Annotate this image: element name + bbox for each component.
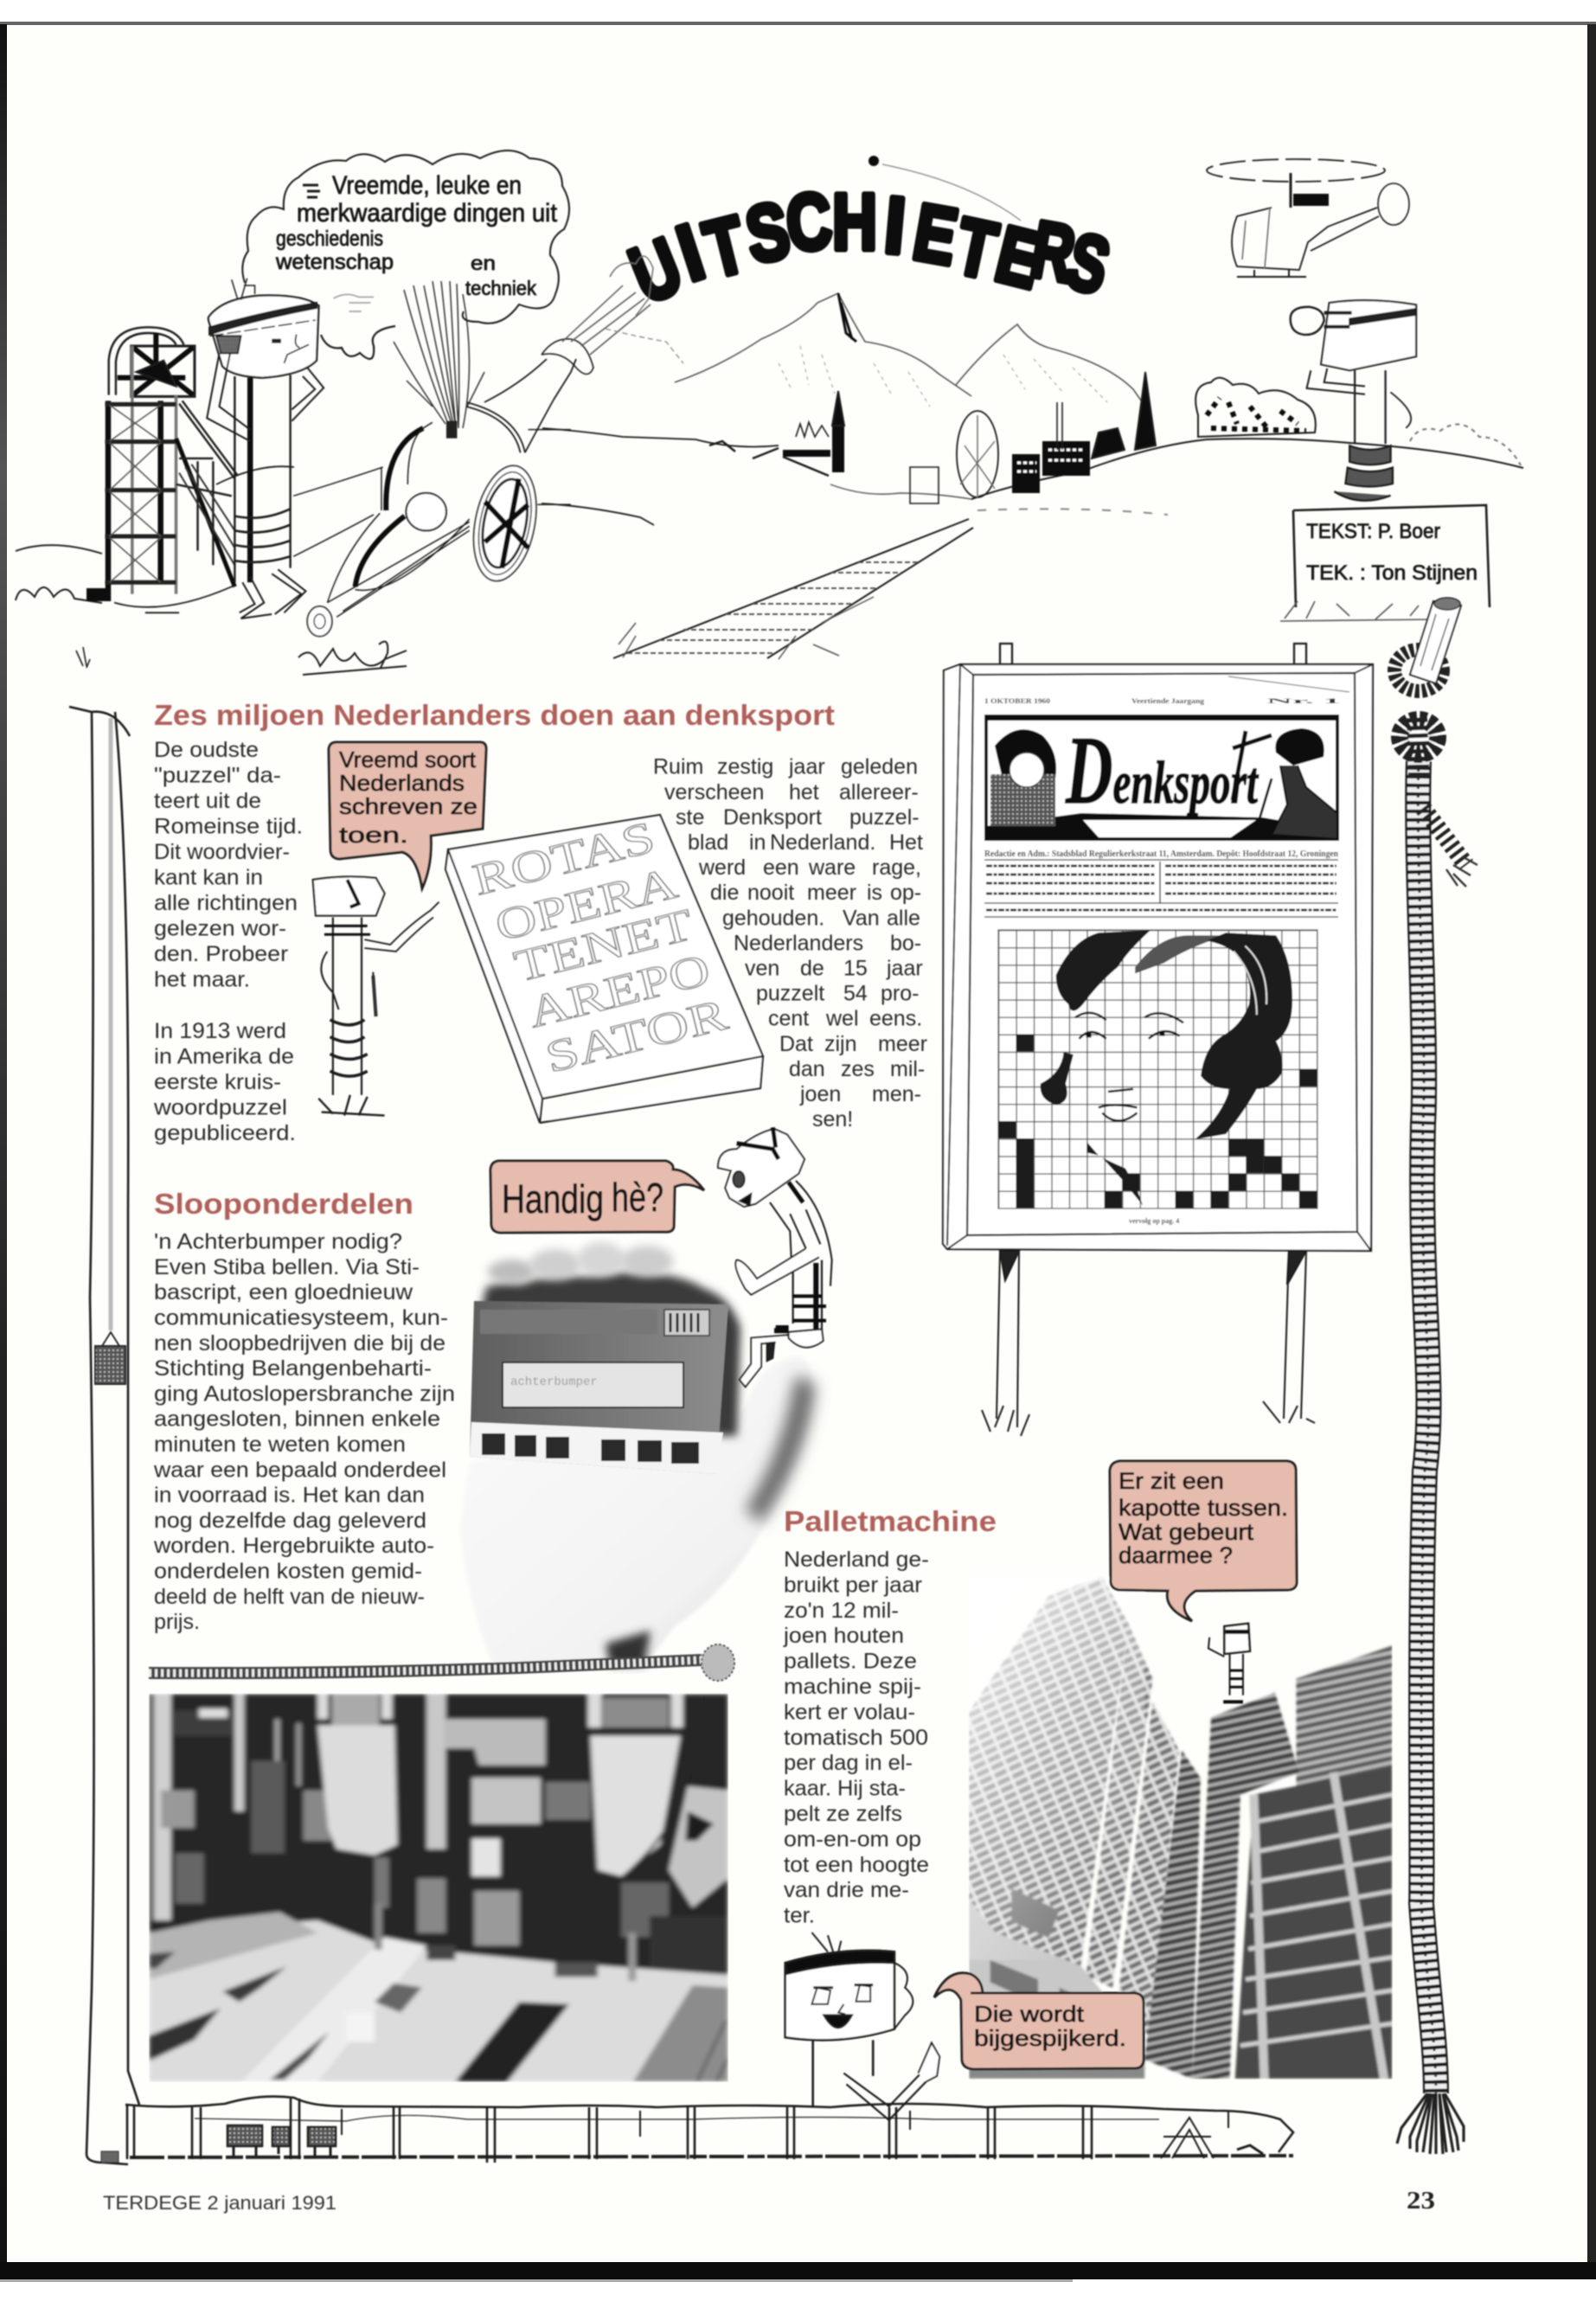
speech bubble: Er zit een kapotte tussen: [1110, 1461, 1297, 1621]
speech bubble: Die wordt bijgespijkerd: Die wordt: [974, 2001, 1085, 2027]
speech bubble: Er zit een kapotte tussen: Wat gebeurt: [1118, 1519, 1254, 1545]
text block: per dag in el-: [784, 1751, 913, 1775]
text block: right column wrapped around the book: meer: [807, 881, 856, 905]
mine tower: [87, 327, 238, 612]
thought cloud with intro text: [242, 151, 569, 359]
thought cloud with intro text: Vreemde, leuke en: [332, 171, 522, 200]
cannon: [293, 402, 571, 637]
title: U: [619, 221, 694, 320]
text block: right column wrapped around the book: die: [710, 881, 739, 905]
heading: Palletmachine: [784, 1505, 997, 1537]
speech bubble: Die wordt bijgespijkerd: [934, 1973, 1144, 2069]
crossword grid with portrait: [998, 930, 1317, 1225]
heading: Zes miljoen Nederlanders doen aan denksport: [154, 699, 835, 731]
speech bubble: Vreemd soort: toen.: [339, 822, 408, 848]
magazine publisher lines: [984, 849, 1338, 917]
text block: joen houten: [783, 1624, 904, 1648]
text block: right column wrapped around the book: joen: [799, 1082, 841, 1106]
page number: 23: [1407, 2188, 1435, 2214]
title: T: [696, 200, 754, 295]
text block: right column wrapped around the book: alle: [887, 906, 920, 930]
credits sign: [1280, 505, 1490, 621]
text block: right column wrapped around the book: mil-: [890, 1057, 925, 1081]
fingers: [481, 1242, 740, 1436]
text block: pallets. Deze: [784, 1650, 917, 1674]
landscape hills, mountains and railway: [16, 293, 1523, 675]
Denksport masthead: [985, 715, 1338, 839]
portrait: face features: [1075, 1013, 1183, 1121]
Denksport masthead: VOOR VIJF WIJSGENEN: [1099, 825, 1227, 838]
text block: 'n Achterbumper nodig?: [154, 1230, 402, 1254]
text block: right column wrapped around the book: is: [867, 881, 882, 905]
text block: left column: De oudste: [154, 738, 259, 762]
text block: machine spij-: [784, 1675, 921, 1699]
crossword grid with portrait: vervolg op pag. 4: [1129, 1217, 1179, 1225]
small character on top of the pallets: [1208, 1624, 1250, 1702]
text block: [153, 1230, 455, 1634]
text block: van drie me-: [784, 1878, 909, 1902]
panel: Denksport magazine on signboard: [943, 644, 1373, 1436]
character with binoculars: [1291, 300, 1416, 501]
icon: hanging weight: [95, 1346, 125, 1384]
thought cloud with intro text: en: [471, 252, 496, 274]
panel: denksport article: [153, 699, 927, 1145]
thought cloud with intro text: merkwaardige dingen uit: [297, 199, 558, 228]
credits sign: TEKST: P. Boer: [1306, 520, 1440, 543]
panel: Slooponderdelen article: [149, 1127, 832, 1681]
text block: left column: "puzzel" da-: [154, 763, 281, 787]
text block: minuten te weten komen: [154, 1433, 406, 1457]
bushes and trees on the right hill: [1195, 378, 1521, 465]
text block: left column: woordpuzzel: [153, 1095, 287, 1119]
character pointing at the book: [313, 876, 439, 1116]
speech bubble: Vreemd soort: [329, 742, 486, 888]
text block: right column wrapped around the book: Nederlanders: [734, 931, 863, 955]
text block: zo'n 12 mil-: [784, 1599, 899, 1623]
title: E: [988, 209, 1049, 305]
device: [470, 1301, 728, 1474]
character sitting on the device: [718, 1127, 832, 1387]
book with ROTAS word square: [445, 813, 763, 1123]
text block: right column wrapped around the book: bo-: [890, 931, 921, 955]
text block: right column wrapped around the book: jaar: [886, 957, 923, 981]
text block: bruikt per jaar: [784, 1573, 922, 1597]
magazine date line: Veertiende Jaargang: [1131, 696, 1205, 705]
text block: right column wrapped around the book: dan: [789, 1057, 825, 1081]
text block: kaar. Hij sta-: [784, 1777, 906, 1801]
text block: right column wrapped around the book: Ruim: [653, 755, 703, 779]
text block: tot een hoogte: [784, 1853, 929, 1877]
text block: right column wrapped around the book: Denksport: [723, 805, 822, 830]
text block: left column: In 1913 werd: [154, 1019, 286, 1043]
hand palm and thumb: [460, 1356, 814, 1665]
Denksport masthead: Denksport: [1065, 717, 1259, 824]
text block: right column wrapped around the book: puzzelt: [756, 982, 824, 1006]
text block: right column wrapped around the book: op-: [890, 881, 921, 905]
magazine date line: Nr. 1: [1266, 696, 1341, 705]
text block: right column wrapped around the book: geleden: [841, 755, 918, 779]
text block: ging Autoslopersbranche zijn: [154, 1381, 455, 1406]
speech bubble: Handig hè: Handig: [502, 1176, 604, 1221]
mine shaft rope frame on the left: [69, 707, 139, 2164]
text block: left column: teert uit de: [154, 789, 261, 813]
text block: right column wrapped around the book: jaar: [788, 755, 825, 779]
text block: right column wrapped around the book: 15: [843, 957, 868, 981]
text block: Nederland ge-: [784, 1548, 929, 1572]
book with ROTAS word square: TENET: [510, 901, 698, 992]
text block: left column: den. Probeer: [154, 942, 288, 966]
panel: header landscape illustration: [16, 151, 1523, 675]
text block: right column wrapped around the book: de: [800, 957, 824, 981]
water fountain from cannon: [394, 281, 484, 428]
title: C: [783, 176, 836, 268]
text block: nen sloopbedrijven die bij de: [154, 1331, 445, 1356]
device: achterbumper: [510, 1375, 598, 1389]
text block: right column wrapped around the book: ste: [676, 805, 704, 830]
title: I: [881, 180, 909, 271]
text block: om-en-om op: [784, 1827, 921, 1851]
text block: right column wrapped around the book: het: [789, 780, 819, 804]
thought cloud with intro text: techniek: [465, 277, 536, 299]
magazine name and date: TERDEGE 2 januari 1991: [103, 2192, 337, 2214]
text block: deeld de helft van de nieuw-: [154, 1585, 425, 1609]
title: S: [1059, 215, 1118, 311]
thought cloud with intro text: geschiedenis: [276, 227, 383, 251]
character looking through hand: [207, 279, 374, 619]
photo: pallet nailing machine: [149, 1694, 728, 2082]
text block: left column: eerste kruis-: [154, 1070, 281, 1094]
book with ROTAS word square: ROTAS: [468, 813, 660, 906]
text block: right column wrapped around the book: cent: [768, 1007, 809, 1031]
footer: [103, 2188, 1435, 2214]
magazine date line: 1 OKTOBER 1960: [984, 696, 1050, 705]
text block: right column wrapped around the book: Nederland.: [770, 830, 875, 855]
text block: pelt ze zelfs: [784, 1802, 902, 1826]
speech bubble: Handig hè: [490, 1161, 704, 1233]
photo: hand holding the communication device: [460, 1242, 815, 1665]
portrait: hair: [1041, 930, 1292, 1206]
title: R: [1025, 203, 1081, 298]
text block: nog dezelfde dag geleverd: [154, 1509, 426, 1533]
magazine publisher lines: Redactie en Adm.: Stadsblad Regulierkerkstraat 11, Amsterdam. Depôt: Hoofdstraat 12, Groningen: [984, 849, 1338, 859]
text block: right column wrapped around the book: nooit: [747, 881, 794, 905]
speech bubble: Er zit een kapotte tussen: kapotte tussen.: [1118, 1495, 1288, 1521]
book with ROTAS word square: OPERA: [490, 858, 683, 952]
speech bubble: Handig hè: hè?: [612, 1175, 663, 1220]
text block: ter.: [784, 1904, 815, 1928]
text block: right column wrapped around the book: puzzel-: [849, 805, 920, 830]
text block: aangesloten, binnen enkele: [154, 1407, 440, 1432]
text block: right column wrapped around the book: blad: [688, 830, 728, 855]
text block: left column: Romeinse tijd.: [154, 815, 303, 839]
text block: kert er volau-: [784, 1700, 915, 1724]
title: S: [740, 186, 796, 280]
text block: in voorraad is. Het kan dan: [154, 1484, 425, 1508]
text block: right column wrapped around the book: meer: [878, 1032, 927, 1056]
text block: tomatisch 500: [784, 1726, 928, 1750]
text block: right column wrapped around the book: allereer-: [839, 780, 919, 804]
small town on the horizon: [709, 372, 1156, 503]
text block: right column wrapped around the book: verscheen: [664, 780, 764, 804]
title: [619, 156, 1118, 320]
text block: right column wrapped around the book: in: [749, 830, 766, 855]
magazine date line: [984, 696, 1341, 705]
text block: right column wrapped around the book: ven: [745, 957, 779, 981]
speech bubble: Vreemd soort: schreven ze: [339, 793, 478, 819]
cannon barrel and muzzle smoke: [484, 256, 683, 452]
text block: right column wrapped around the book: zes: [841, 1057, 875, 1081]
text block: left column: Dit woordvier-: [154, 840, 290, 864]
text block: right column wrapped around the book: werd: [698, 856, 746, 880]
title: H: [832, 177, 877, 266]
text block: right column wrapped around the book: eens.: [869, 1007, 922, 1031]
text block: left column: gepubliceerd.: [154, 1121, 296, 1145]
frayed rope end: [1397, 2093, 1464, 2154]
text block: right column wrapped around the book: een: [763, 856, 799, 880]
speech bubble: Er zit een kapotte tussen: daarmee ?: [1118, 1542, 1233, 1568]
text block: right column wrapped around the book: men-: [872, 1082, 921, 1106]
text block: right column wrapped around the book: rage,: [872, 856, 921, 880]
text block: Stichting Belangenbeharti-: [154, 1356, 432, 1381]
signboard frame and legs: [943, 644, 1373, 1436]
photo: towers of stacked pallets: [969, 1577, 1392, 2079]
heading: Slooponderdelen: [154, 1188, 413, 1220]
text block: right column wrapped around the book: gehouden.: [722, 906, 824, 930]
helicopter: [1207, 159, 1409, 277]
text block: right column wrapped around the book: Dat: [779, 1032, 813, 1056]
text block: right column wrapped around the book: Het: [889, 830, 923, 855]
rope on the right side: [1394, 598, 1477, 2154]
text block: onderdelen kosten gemid-: [154, 1559, 422, 1583]
text block: Even Stiba bellen. Via Sti-: [154, 1255, 420, 1279]
mine carts: [228, 2125, 336, 2156]
text block: right column wrapped around the book: zestig: [717, 755, 773, 779]
text block: right column wrapped around the book: [653, 755, 927, 1131]
cheerful character with thumbs up: [785, 1932, 939, 2120]
text block: right column wrapped around the book: zijn: [824, 1032, 857, 1056]
text block: right column wrapped around the book: wel: [825, 1007, 859, 1031]
text block: left column: in Amerika de: [154, 1045, 294, 1069]
text block: left column: [153, 738, 303, 1145]
text block: right column wrapped around the book: ware: [808, 856, 856, 880]
book with ROTAS word square: SATOR: [541, 990, 733, 1083]
text block: bascript, een gloednieuw: [154, 1280, 413, 1304]
text block: left column: gelezen wor-: [154, 917, 286, 941]
mine railway along the bottom: [101, 2097, 1293, 2163]
panel: Palletmachine article: [783, 1461, 1392, 2120]
rope knot and wooden stake: [1394, 598, 1477, 887]
speech bubble: Die wordt bijgespijkerd: bijgespijkerd.: [974, 2025, 1126, 2051]
text block: right column wrapped around the book: 54: [843, 982, 868, 1006]
book with ROTAS word square: AREPO: [523, 945, 715, 1038]
text block: right column wrapped around the book: pro-: [881, 982, 919, 1006]
speech bubble: Vreemd soort: Nederlands: [339, 770, 465, 796]
speech bubble: Er zit een kapotte tussen: Er zit een: [1118, 1468, 1224, 1494]
twisted rope divider with knot: [149, 1644, 734, 1681]
text block: worden. Hergebruikte auto-: [153, 1534, 434, 1558]
thought cloud with intro text: wetenschap: [275, 250, 394, 274]
speech bubble: Vreemd soort: Vreemd soort: [339, 747, 477, 772]
text block: right column wrapped around the book: sen!: [812, 1107, 853, 1131]
title: T: [948, 202, 1004, 296]
title: E: [907, 188, 964, 282]
text block: communicatiesysteem, kun-: [154, 1306, 448, 1330]
text block: left column: kant kan in: [154, 865, 263, 889]
text block: prijs.: [154, 1610, 200, 1634]
text block: waar een bepaald onderdeel: [153, 1458, 446, 1482]
text block: left column: alle richtingen: [154, 891, 298, 915]
text block: left column: het maar.: [154, 967, 250, 991]
title: I: [667, 207, 714, 298]
text block: [783, 1548, 929, 1928]
credits sign: TEK. : Ton Stijnen: [1306, 561, 1477, 585]
text block: right column wrapped around the book: Van: [843, 906, 880, 930]
